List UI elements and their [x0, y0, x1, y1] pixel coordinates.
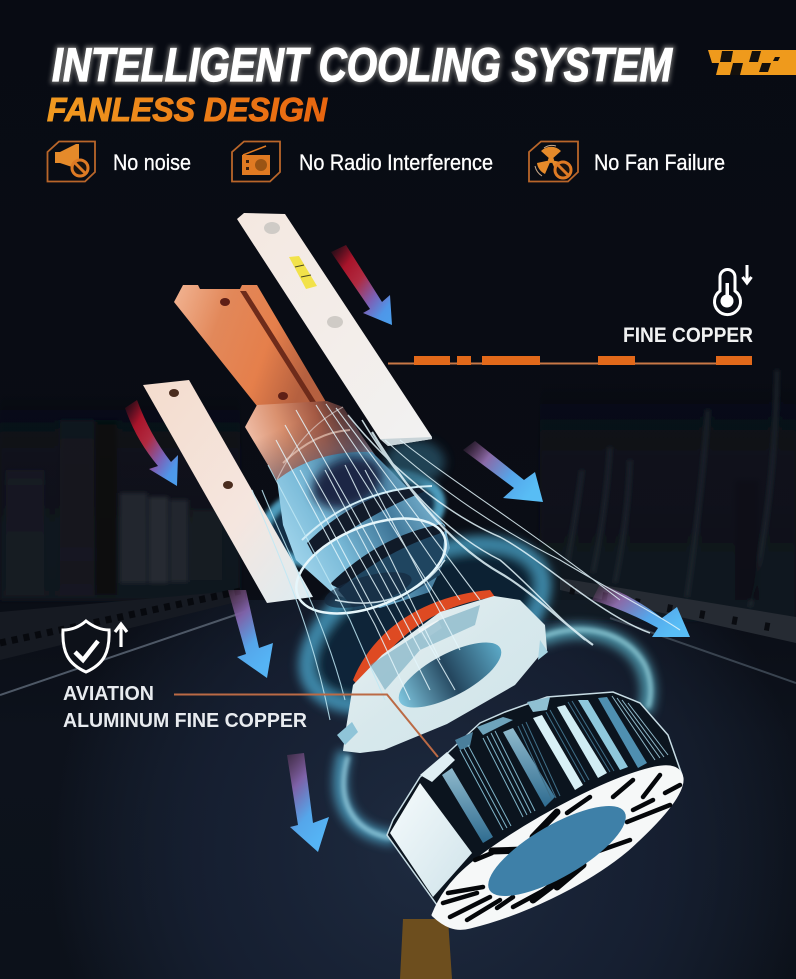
checkered flag decoration [708, 50, 796, 75]
flat panel [390, 783, 472, 897]
bulb body [245, 401, 459, 633]
label: aviation aluminum fine copper: AVIATION [63, 683, 154, 705]
flame shaped grooves [443, 775, 680, 920]
heat sink front face [433, 767, 682, 928]
lane marking [400, 919, 452, 979]
callout: leader line to heat sink [174, 694, 438, 757]
subtitle: FANLESS DESIGN [47, 91, 328, 128]
lower cylinder shadow [321, 565, 415, 615]
glow rings behind parts [255, 440, 651, 838]
rim pieces [420, 752, 455, 782]
icon: thermometer with down arrow [714, 265, 752, 315]
white air stream lines [252, 404, 680, 720]
flange with oval opening [337, 596, 548, 753]
feature: no noise [48, 142, 191, 182]
icon: shield with check and up arrow [63, 621, 127, 672]
icon: muted speaker [48, 142, 95, 182]
dark bands [307, 486, 426, 556]
label: No noise [113, 150, 191, 175]
arrow: left heat flow [125, 400, 178, 486]
label: aviation aluminum fine copper: ALUMINUM FINE COPPER [63, 710, 308, 732]
LED chips [289, 256, 317, 289]
icon: radio [232, 142, 280, 182]
road edges and railings [0, 590, 245, 660]
copper heat bar [174, 285, 326, 406]
label: fine copper: FINE COPPER [623, 324, 753, 347]
title: INTELLIGENT COOLING SYSTEM [52, 38, 673, 91]
arrow: bottom air flow [287, 753, 329, 852]
title: INTELLIGENT COOLING SYSTEM [52, 38, 673, 91]
label: No Radio Interference [299, 150, 493, 175]
blue centre disc [476, 789, 638, 913]
arrow: far right air flow [592, 584, 690, 637]
glass cylinder [277, 452, 450, 608]
left tunnel wall panels [0, 390, 240, 600]
bottom PCB plate [143, 380, 313, 603]
white ring [283, 499, 459, 633]
fins [442, 697, 647, 843]
feature: no fan failure [529, 142, 725, 182]
exploded LED bulb illustration [143, 213, 682, 928]
arrow: right air flow [463, 441, 543, 502]
finned heat sink [387, 692, 682, 928]
orange rule under fine copper [388, 356, 752, 365]
red copper coil [353, 590, 495, 690]
arrow: lower left air flow [228, 590, 273, 678]
label: No Fan Failure [594, 150, 725, 175]
fin hatching [460, 696, 668, 830]
arrow: top heat flow [331, 245, 392, 325]
label: aviation aluminum fine copper [63, 683, 308, 732]
top PCB plate with LED chips [237, 213, 432, 446]
right tunnel wall panels [540, 370, 796, 620]
copper collar [245, 401, 375, 505]
feature: no radio interference [232, 142, 493, 182]
heat sink side [387, 692, 682, 905]
icon: fan with prohibition [529, 142, 578, 182]
